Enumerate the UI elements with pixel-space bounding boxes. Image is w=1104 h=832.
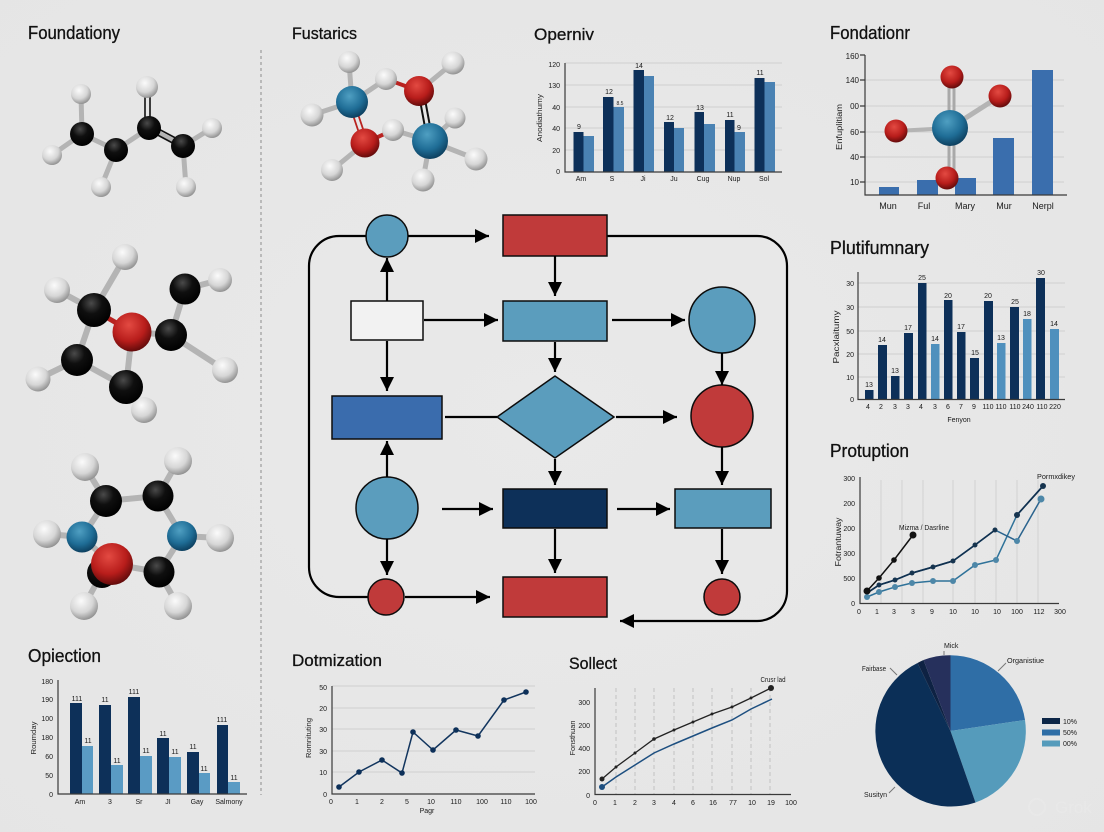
panel: line chart Protuption: 200 <box>843 501 855 508</box>
loop return arrow <box>607 236 787 621</box>
panel: bar chart Plutifumnary: 110 <box>995 404 1007 411</box>
panel: bar chart Plutifumnary: 4 <box>866 404 870 411</box>
panel: bar chart Operniv: Cug <box>697 176 710 183</box>
panel: line chart Dotmization: 1 <box>355 799 359 806</box>
panel: line chart Dotmization: Pagr <box>420 808 435 815</box>
panel: bar chart Opiection: 180 <box>41 735 53 742</box>
panel: bar chart Operniv: 130 <box>548 83 560 90</box>
panel: bar chart Operniv: 12 <box>605 89 613 96</box>
panel: bar chart Opiection: 11 <box>113 758 121 765</box>
panel: bar chart Plutifumnary: 110 <box>982 404 994 411</box>
panel: bar chart Operniv: 14 <box>635 63 643 70</box>
panel: pie chart <box>862 643 1077 807</box>
panel: line chart Sollect: 1 <box>613 800 617 807</box>
panel: bar chart Plutifumnary: 3 <box>933 404 937 411</box>
panel: line chart Protuption: 300 <box>1054 609 1066 616</box>
panel: line chart Sollect: 400 <box>578 746 590 753</box>
arrows <box>387 236 722 597</box>
panel: bar chart Opiection: 11 <box>142 748 150 755</box>
panel: bar chart Plutifumnary: 14 <box>931 336 939 343</box>
panel: line chart Sollect: 16 <box>709 800 717 807</box>
panel: line chart Dotmization: 0 <box>329 799 333 806</box>
panel: bar chart Plutifumnary: 240 <box>1022 404 1034 411</box>
title: Sollect: Sollect <box>569 654 617 673</box>
panel: bar chart Operniv: 20 <box>552 148 560 155</box>
panel: bar chart Plutifumnary: 13 <box>865 382 873 389</box>
panel: line chart Dotmization: 110 <box>500 799 512 806</box>
node: top red box <box>503 215 607 256</box>
panel: bar chart Plutifumnary: 18 <box>1023 311 1031 318</box>
panel: bar chart Opiection: 11 <box>84 738 92 745</box>
panel: bar chart Operniv: 11 <box>756 70 764 77</box>
panel: bar chart Fondation with molecule: 00 <box>850 102 860 111</box>
panel: bar chart Operniv: 0 <box>556 169 560 176</box>
panel: line chart Sollect: Fonsthuan <box>570 720 577 755</box>
panel: line chart Sollect: 10 <box>748 800 756 807</box>
panel: line chart Protuption: 100 <box>1011 609 1023 616</box>
panel: bar chart Plutifumnary: 30 <box>846 305 854 312</box>
panel: molecule 1 <box>28 23 222 197</box>
title: Dotmization: Dotmization <box>292 651 382 670</box>
panel: line chart Sollect: 0 <box>593 800 597 807</box>
panel: bar chart Opiection: 11 <box>159 731 167 738</box>
panel: line chart Protuption: 10 <box>949 609 957 616</box>
panel: bar chart Operniv: Ju <box>670 176 678 183</box>
panel: line chart Dotmization: 110 <box>450 799 462 806</box>
panel: bar chart Plutifumnary: 14 <box>878 337 886 344</box>
node: navy box <box>503 489 607 528</box>
panel: bar chart Opiection: 11 <box>230 775 238 782</box>
panel: bar chart Opiection: Roumday <box>31 721 38 754</box>
loop connector lines <box>309 236 368 597</box>
panel: line chart Sollect: 3 <box>652 800 656 807</box>
panel: line chart Sollect: 200 <box>578 723 590 730</box>
panel: pie chart: Fairbase <box>862 666 886 673</box>
legend: 10% <box>1063 719 1077 726</box>
panel: bar chart Operniv: 13 <box>696 105 704 112</box>
panel: bar chart Plutifumnary: 220 <box>1049 404 1061 411</box>
panel: line chart Dotmization: 2 <box>380 799 384 806</box>
panel: bar chart Plutifumnary: 13 <box>997 335 1005 342</box>
panel: bar chart Plutifumnary: Fenyon <box>947 417 971 424</box>
legend: 50% <box>1063 730 1077 737</box>
panel: line chart Protuption: 9 <box>930 609 934 616</box>
panel: line chart Dotmization: 100 <box>476 799 488 806</box>
panel: bar chart Plutifumnary: 50 <box>846 329 854 336</box>
panel: bar chart Operniv: 8.5 <box>617 101 624 107</box>
panel: bar chart Opiection: 0 <box>49 792 53 799</box>
panel: bar chart Plutifumnary: 110 <box>1036 404 1048 411</box>
panel: line chart Protuption: 0 <box>851 601 855 608</box>
panel: bar chart Plutifumnary: Pacxlaitumy <box>832 310 841 364</box>
node: blue box <box>332 396 442 439</box>
panel: bar chart Opiection: 11 <box>189 744 197 751</box>
node: teal box <box>503 301 607 341</box>
panel: line chart Dotmization: 50 <box>319 685 327 692</box>
panel: bar chart Operniv: S <box>610 176 615 183</box>
panel: bar chart Operniv: Anodiathumy <box>537 93 544 142</box>
panel: bar chart Plutifumnary: 30 <box>1037 270 1045 277</box>
panel: bar chart Plutifumnary: 3 <box>893 404 897 411</box>
panel: bar chart Plutifumnary: 3 <box>906 404 910 411</box>
panel: bar chart Plutifumnary: 17 <box>904 325 912 332</box>
panel: bar chart Fondation with molecule: Nerpl <box>1032 201 1054 211</box>
panel: bar chart Opiection: 50 <box>45 773 53 780</box>
node: white box <box>351 301 423 340</box>
panel: bar chart Fondation with molecule: 140 <box>846 76 860 85</box>
title: Fondationr: Fondationr <box>830 23 910 43</box>
icon: molecule over bars <box>884 66 1012 190</box>
panel: molecule 4 <box>292 24 488 192</box>
panel: bar chart Opiection: 100 <box>41 716 53 723</box>
panel: line chart Sollect: 0 <box>586 793 590 800</box>
panel: bar chart Plutifumnary: 14 <box>1050 321 1058 328</box>
panel: bar chart Plutifumnary: 25 <box>918 275 926 282</box>
panel: bar chart Operniv: 9 <box>577 124 581 131</box>
panel: line chart Dotmization: 20 <box>319 706 327 713</box>
legend <box>1042 718 1077 748</box>
panel: line chart Protuption: 0 <box>857 609 861 616</box>
panel: bar chart Plutifumnary: 15 <box>971 350 979 357</box>
panel: line chart Protuption: 300 <box>843 476 855 483</box>
panel: line chart Sollect <box>569 654 797 807</box>
panel: line chart Protuption: 112 <box>1033 609 1045 616</box>
panel: bar chart Opiection: Sr <box>136 799 143 806</box>
panel: bar chart Fondation with molecule <box>830 23 1067 211</box>
panel: bar chart Plutifumnary: 7 <box>959 404 963 411</box>
panel: line chart Dotmization <box>292 651 537 815</box>
panel: bar chart Fondation with molecule: 10 <box>850 178 860 187</box>
panel: line chart Sollect: 19 <box>767 800 775 807</box>
node: right teal box <box>675 489 771 528</box>
panel: bar chart Opiection: JI <box>165 799 171 806</box>
panel: line chart Dotmization: 100 <box>525 799 537 806</box>
panel: line chart Dotmization: 10 <box>319 770 327 777</box>
panel: bar chart Operniv: Ji <box>640 176 646 183</box>
panel: bar chart Opiection: 190 <box>41 697 53 704</box>
panel: bar chart Operniv: Am <box>576 176 586 183</box>
panel: bar chart Opiection: 111 <box>129 689 139 696</box>
panel: bar chart Plutifumnary: 30 <box>846 281 854 288</box>
panel: bar chart Opiection: Gay <box>191 799 204 806</box>
node: small red circle left <box>368 579 404 615</box>
panel: bar chart Operniv: 120 <box>548 62 560 69</box>
panel: bar chart Fondation with molecule: Ful <box>918 201 930 211</box>
panel: pie chart: Mick <box>944 643 959 650</box>
panel: bar chart Plutifumnary: 20 <box>846 352 854 359</box>
panel: bar chart Plutifumnary: 4 <box>919 404 923 411</box>
panel: bar chart Plutifumnary <box>830 238 1065 424</box>
panel: line chart Dotmization: 5 <box>405 799 409 806</box>
panel: bar chart Opiection: 11 <box>101 697 109 704</box>
panel: bar chart Fondation with molecule: 160 <box>846 52 860 61</box>
panel: line chart Sollect: 100 <box>785 800 797 807</box>
panel: bar chart Plutifumnary: 20 <box>984 293 992 300</box>
panel: bar chart Opiection: Salmony <box>215 799 243 806</box>
panel: bar chart Operniv: 11 <box>726 112 734 119</box>
panel: line chart Protuption: 3 <box>892 609 896 616</box>
node: top circle <box>366 215 408 257</box>
panel: bar chart Fondation with molecule: 60 <box>850 128 860 137</box>
panel: bar chart Fondation with molecule: 40 <box>850 153 860 162</box>
panel: bar chart Opiection: 111 <box>72 696 82 703</box>
node: large red circle <box>691 385 753 447</box>
title: Foundationy: Foundationy <box>28 23 120 43</box>
panel: line chart Protuption: 10 <box>971 609 979 616</box>
node: small red circle right <box>704 579 740 615</box>
panel: line chart Protuption: 200 <box>843 526 855 533</box>
panel: bar chart Plutifumnary: 20 <box>944 293 952 300</box>
node: decision diamond <box>497 376 614 458</box>
panel: bar chart Opiection: 11 <box>171 749 179 756</box>
panel: bar chart Plutifumnary: 0 <box>850 397 854 404</box>
panel: line chart Protuption: 500 <box>843 576 855 583</box>
panel: bar chart Plutifumnary: 110 <box>1009 404 1021 411</box>
panel: line chart Protuption: 1 <box>875 609 879 616</box>
panel: bar chart Fondation with molecule: Enfuplitiam <box>835 104 844 150</box>
panel: line chart Dotmization: 10 <box>427 799 435 806</box>
panel: bar chart Opiection: 180 <box>41 679 53 686</box>
panel: bar chart Plutifumnary: 10 <box>846 375 854 382</box>
panel: molecule 2 <box>26 244 238 423</box>
title: Opiection: Opiection <box>28 646 101 666</box>
flowchart <box>309 215 787 621</box>
panel: bar chart Opiection: Am <box>75 799 85 806</box>
panel: bar chart Plutifumnary: 13 <box>891 368 899 375</box>
watermark <box>1029 798 1092 817</box>
panel: line chart Dotmization: Romnituting <box>306 718 313 758</box>
panel: bar chart Operniv <box>534 25 782 183</box>
panel: line chart Protuption: Fotrantuway <box>834 518 843 566</box>
panel: line chart Sollect: 77 <box>729 800 737 807</box>
title: Protuption: Protuption <box>830 441 909 461</box>
node: large teal circle <box>689 287 755 353</box>
panel: bar chart Fondation with molecule: Mun <box>879 201 897 211</box>
panel: bar chart Opiection: 60 <box>45 754 53 761</box>
panel: molecule 3 <box>33 447 234 620</box>
title: Operniv: Operniv <box>534 25 594 44</box>
panel: bar chart Plutifumnary: 6 <box>946 404 950 411</box>
panel: pie chart: Susityn <box>864 792 887 799</box>
panel: line chart Dotmization: 0 <box>323 792 327 799</box>
panel: bar chart Plutifumnary: 17 <box>957 324 965 331</box>
panel: bar chart Opiection: 111 <box>217 717 227 724</box>
panel: bar chart Plutifumnary: 25 <box>1011 299 1019 306</box>
panel: line chart Sollect: 2 <box>633 800 637 807</box>
node: teal circle <box>356 477 418 539</box>
panel: line chart Sollect: Crusr lad <box>760 677 786 684</box>
panel: line chart Dotmization: 30 <box>319 749 327 756</box>
panel: bar chart Operniv: 9 <box>737 125 741 132</box>
panel: bar chart Operniv: 12 <box>666 115 674 122</box>
panel: line chart Dotmization: 30 <box>319 727 327 734</box>
panel: bar chart Operniv: Sol <box>759 176 769 183</box>
panel: line chart Protuption: Mizma / Dasrline <box>899 525 949 532</box>
panel: bar chart Fondation with molecule: Mary <box>955 201 975 211</box>
watermark: Grok <box>1055 798 1092 817</box>
panel: line chart Sollect: 4 <box>672 800 676 807</box>
panel: bar chart Operniv: 40 <box>552 105 560 112</box>
panel: bar chart Fondation with molecule: Mur <box>996 201 1012 211</box>
panel: line chart Sollect: 300 <box>578 700 590 707</box>
node: bottom red box <box>503 577 607 617</box>
panel: line chart Protuption: 300 <box>843 551 855 558</box>
panel: pie chart: Organistiue <box>1007 658 1044 665</box>
panel: bar chart Plutifumnary: 9 <box>972 404 976 411</box>
panel: line chart Protuption <box>830 441 1076 616</box>
panel: line chart Sollect: 200 <box>578 769 590 776</box>
legend: 00% <box>1063 741 1077 748</box>
panel: bar chart Opiection: 3 <box>108 799 112 806</box>
panel: line chart Sollect: 6 <box>691 800 695 807</box>
panel: bar chart Opiection <box>28 646 247 806</box>
panel: bar chart Operniv: Nup <box>728 176 741 183</box>
title: Fustarics: Fustarics <box>292 24 357 43</box>
panel: line chart Protuption: 3 <box>911 609 915 616</box>
panel: bar chart Opiection: 11 <box>200 766 208 773</box>
title: Plutifumnary: Plutifumnary <box>830 238 929 258</box>
panel: bar chart Operniv: 40 <box>552 126 560 133</box>
panel: bar chart Plutifumnary: 2 <box>879 404 883 411</box>
panel: line chart Protuption: Pormxdikey <box>1037 474 1076 481</box>
panel: line chart Protuption: 10 <box>993 609 1001 616</box>
